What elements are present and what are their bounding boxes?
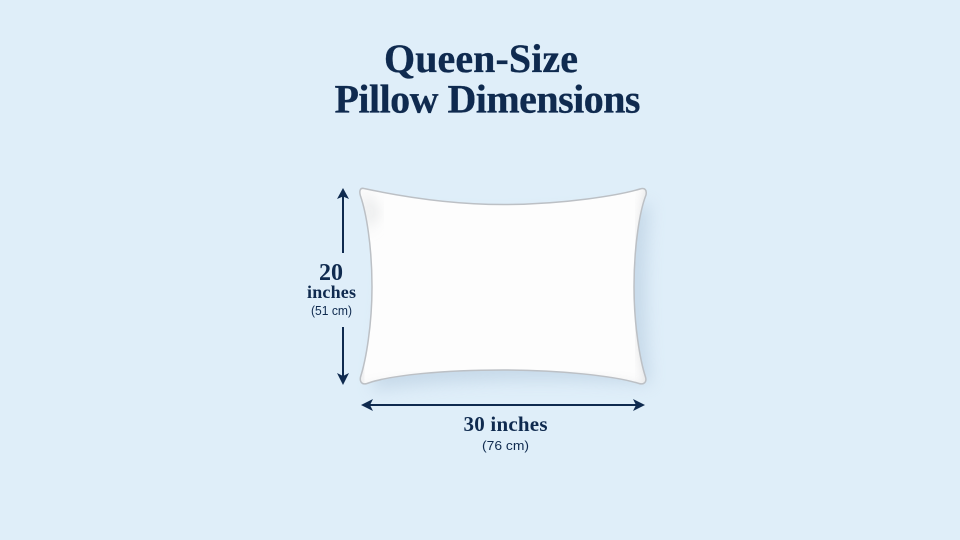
width label: (76 cm) xyxy=(482,438,529,453)
height label: inches xyxy=(307,282,356,302)
height dimension arrow xyxy=(337,188,349,385)
infographic canvas xyxy=(307,44,652,452)
title: Pillow Dimensions xyxy=(334,76,640,122)
height label: 20 xyxy=(319,260,343,286)
title xyxy=(334,36,640,122)
upper arrow xyxy=(337,188,349,253)
pillow shading xyxy=(361,190,646,383)
pillow body xyxy=(360,188,646,384)
height label: (51 cm) xyxy=(311,303,352,318)
pillow piping xyxy=(360,188,646,384)
width label: 30 inches xyxy=(464,412,548,436)
pillow shadow xyxy=(372,204,650,390)
title: Queen-Size xyxy=(384,36,578,81)
width dimension arrow xyxy=(361,399,645,411)
width label xyxy=(464,412,548,453)
lower arrow xyxy=(337,327,349,385)
pillow xyxy=(359,188,652,391)
height label xyxy=(307,260,356,318)
